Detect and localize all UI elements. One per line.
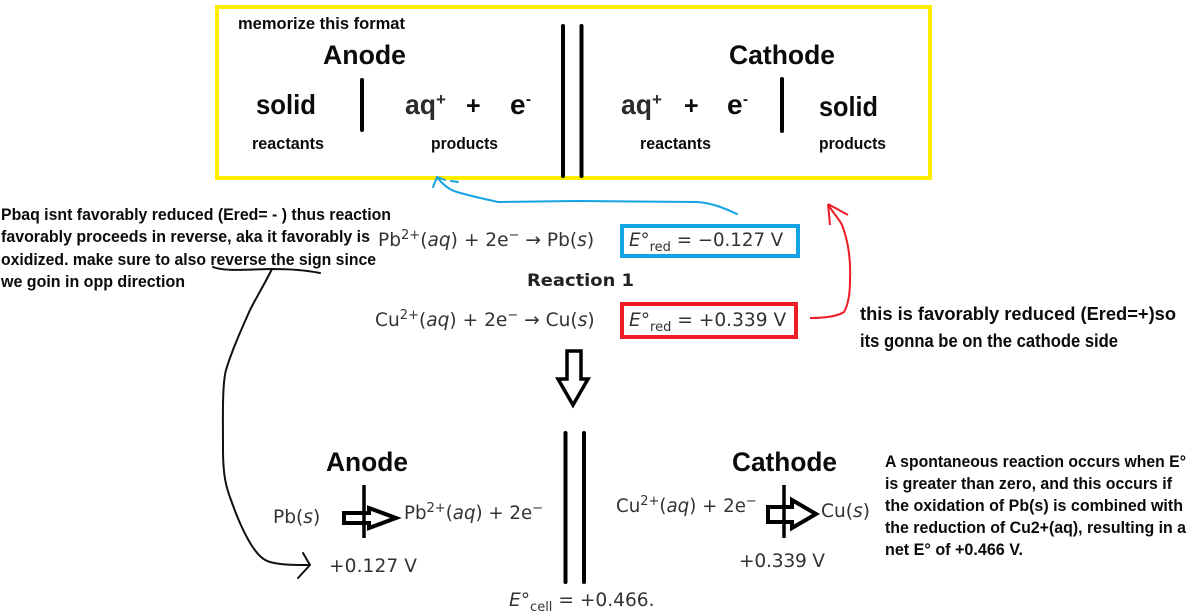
equation: copper half reaction: aq) + 2e bbox=[426, 310, 507, 331]
arrow: red hand-drawn to cathode side bbox=[810, 204, 850, 318]
anode products: aq) + 2e bbox=[453, 503, 532, 524]
anode products: − bbox=[532, 501, 543, 516]
note: spontaneous reaction: is greater than zero, and this occurs if bbox=[885, 475, 1172, 493]
anode products formula: - bbox=[526, 91, 531, 108]
cathode voltage: +0.339 V bbox=[739, 551, 825, 572]
cathode equation bbox=[616, 485, 870, 538]
cathode product: Cu(s) bbox=[821, 501, 870, 522]
equation: lead half reaction: − bbox=[509, 228, 520, 243]
equation: lead half reaction: → Pb( bbox=[520, 230, 577, 251]
double divider bbox=[566, 433, 584, 582]
note: Pbaq explanation: oxidized. make sure to also reverse the sign since bbox=[1, 251, 376, 269]
heading: Anode: Anode bbox=[326, 447, 408, 477]
anode products formula: aq bbox=[405, 89, 436, 120]
box: copper reduction potential bbox=[622, 304, 796, 337]
label: reactants: reactants bbox=[252, 135, 324, 153]
note: spontaneous reaction: net E° of +0.466 V. bbox=[885, 541, 1023, 559]
cathode reactants: Cu bbox=[616, 496, 640, 517]
cathode reactants: 2+ bbox=[640, 494, 659, 509]
equation: lead half reaction: aq) + 2e bbox=[427, 230, 509, 251]
heading: Anode: Anode bbox=[323, 40, 406, 70]
note: favorably reduced: its gonna be on the cathode side bbox=[860, 331, 1118, 351]
cathode divider bbox=[780, 79, 784, 131]
anode products formula: + bbox=[466, 92, 481, 120]
equation: copper half reaction: Cu bbox=[375, 310, 400, 331]
cathode reactants formula: - bbox=[743, 91, 748, 108]
anode voltage: +0.127 V bbox=[329, 556, 417, 577]
equation: copper half reaction: s) bbox=[578, 310, 595, 331]
anode products formula: e bbox=[510, 89, 526, 120]
cathode reactants formula bbox=[621, 89, 748, 120]
label: reactants: reactants bbox=[640, 135, 711, 153]
cathode reactants formula: + bbox=[684, 92, 699, 120]
panel: memorize this format bbox=[217, 7, 930, 178]
equation: copper half reaction: 2+ bbox=[400, 308, 419, 323]
box: lead reduction potential: E° bbox=[629, 230, 650, 251]
cathode divider bbox=[782, 485, 786, 538]
anode products: Pb bbox=[404, 503, 427, 524]
hollow arrow bbox=[344, 508, 396, 528]
equation: copper half reaction: → Cu( bbox=[518, 310, 578, 331]
equation: lead half reaction: 2+ bbox=[401, 228, 420, 243]
anode divider bbox=[362, 485, 366, 538]
cathode reactants formula: e bbox=[727, 89, 743, 120]
cathode reactants: − bbox=[746, 494, 757, 509]
equation: copper half reaction: − bbox=[507, 308, 518, 323]
hollow arrow bbox=[768, 500, 816, 528]
box: lead reduction potential: red bbox=[650, 240, 671, 255]
note: Pbaq explanation: favorably proceeds in reverse, aka it favorably is bbox=[1, 228, 370, 246]
cathode reactants: ( bbox=[659, 496, 667, 517]
cell potential: = +0.466. bbox=[552, 590, 655, 611]
note: favorably reduced bbox=[860, 304, 1176, 351]
box: copper reduction potential: E° bbox=[629, 310, 650, 331]
cathode reactants: aq) + 2e bbox=[667, 496, 746, 517]
note: spontaneous reaction: A spontaneous reaction occurs when E° bbox=[885, 453, 1186, 471]
label: solid: solid bbox=[256, 89, 316, 120]
box: lead reduction potential bbox=[622, 226, 798, 256]
label: products: products bbox=[819, 135, 886, 153]
anode equation bbox=[273, 485, 543, 538]
equation: copper half reaction: ( bbox=[419, 310, 426, 331]
note: favorably reduced: this is favorably reduced (Ered=+)so bbox=[860, 304, 1176, 324]
anode reactant: Pb(s) bbox=[273, 507, 320, 528]
double divider bbox=[563, 26, 582, 176]
cell potential: cell bbox=[530, 600, 552, 615]
note: spontaneous reaction: the reduction of Cu2+(aq), resulting in a bbox=[885, 519, 1187, 537]
label: solid: solid bbox=[819, 91, 878, 122]
cell potential: E° bbox=[509, 590, 530, 611]
cathode reactants formula: aq bbox=[621, 89, 652, 120]
box: copper reduction potential: red bbox=[650, 320, 671, 335]
note: Pbaq explanation bbox=[0, 206, 391, 291]
anode divider bbox=[360, 80, 364, 130]
anode products: 2+ bbox=[427, 501, 446, 516]
note: Pbaq explanation: we goin in opp direction bbox=[0, 273, 185, 291]
cathode reactants formula: + bbox=[652, 90, 662, 109]
anode products formula: + bbox=[436, 90, 446, 109]
anode products: ( bbox=[446, 503, 453, 524]
heading: Cathode: Cathode bbox=[732, 447, 837, 477]
note: memorize this format: memorize this format bbox=[238, 15, 405, 33]
arrow: hollow down arrow bbox=[558, 351, 588, 405]
anode products formula bbox=[405, 89, 531, 120]
note: spontaneous reaction: the oxidation of Pb(s) is combined with bbox=[885, 497, 1183, 515]
note: spontaneous reaction bbox=[885, 453, 1187, 559]
heading: Reaction 1: Reaction 1 bbox=[527, 271, 634, 291]
heading: Cathode: Cathode bbox=[729, 40, 835, 70]
note: Pbaq explanation: Pbaq isnt favorably reduced (Ered= - ) thus reaction bbox=[1, 206, 391, 224]
equation: lead half reaction: Pb bbox=[378, 230, 401, 251]
panel border bbox=[217, 7, 930, 178]
label: products: products bbox=[431, 135, 498, 153]
equation: lead half reaction: ( bbox=[420, 230, 427, 251]
arrow: black hand-drawn from reverse the sign to +0.127 V bbox=[213, 267, 320, 578]
box: lead reduction potential: = −0.127 V bbox=[671, 230, 784, 251]
arrow: blue hand-drawn to anode products bbox=[433, 177, 737, 214]
box: copper reduction potential: = +0.339 V bbox=[671, 310, 786, 331]
equation: lead half reaction: s) bbox=[577, 230, 594, 251]
